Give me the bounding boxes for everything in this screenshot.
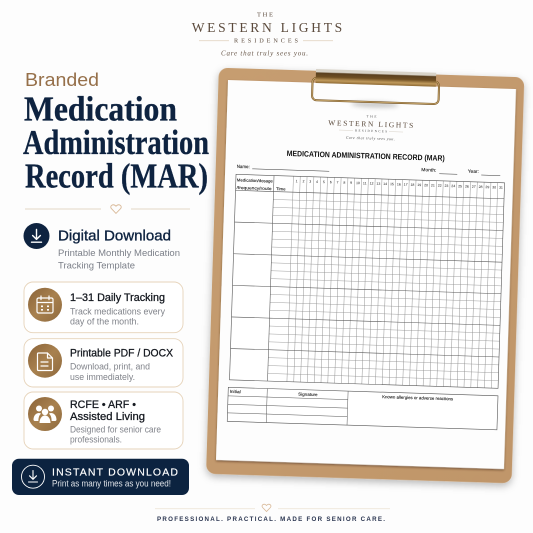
day numbers: 3 xyxy=(309,180,311,184)
day numbers: 15 xyxy=(390,182,394,186)
signature and allergies table xyxy=(227,387,498,430)
day numbers: 31 xyxy=(499,186,503,190)
footer divider with heart xyxy=(155,504,390,512)
brand logo: RESIDENCES xyxy=(234,38,299,45)
form logo: Care that truly sees you. xyxy=(346,136,395,141)
card text: Download, print, and xyxy=(70,362,150,372)
day numbers: 16 xyxy=(397,182,401,187)
card text: use immediately. xyxy=(70,372,135,382)
description xyxy=(58,248,180,272)
card text: Printable PDF / DOCX xyxy=(70,348,174,360)
day numbers: 22 xyxy=(438,184,442,188)
button text: INSTANT DOWNLOAD xyxy=(52,466,178,478)
grid column headers: Time xyxy=(276,186,286,191)
form logo: WESTERN LIGHTS xyxy=(328,118,413,130)
grid column headers xyxy=(237,177,287,192)
signature and allergies table: Signature xyxy=(298,392,318,397)
day numbers: 1 xyxy=(296,179,298,183)
form fields xyxy=(237,161,500,177)
day numbers: 24 xyxy=(451,184,455,188)
card text: Designed for senior care xyxy=(70,425,161,435)
day numbers: 7 xyxy=(337,181,339,185)
form logo: THE xyxy=(366,114,377,119)
icon: people xyxy=(28,397,62,431)
signature and allergies table: Initial xyxy=(230,389,241,394)
title: Record (MAR) xyxy=(25,157,208,196)
brand logo: THE xyxy=(257,12,273,19)
icon: document xyxy=(28,344,62,378)
icon: calendar xyxy=(28,288,62,322)
brand logo xyxy=(192,12,342,58)
day numbers xyxy=(296,179,503,190)
clipboard board xyxy=(206,68,524,483)
divider with heart xyxy=(25,205,190,213)
card text xyxy=(70,348,174,382)
day numbers: 9 xyxy=(350,181,352,185)
day numbers: 30 xyxy=(492,185,496,190)
day numbers: 8 xyxy=(343,181,345,185)
footer tagline: PROFESSIONAL. PRACTICAL. MADE FOR SENIOR CARE. xyxy=(157,516,385,523)
card text: RCFE • ARF • xyxy=(70,399,136,411)
day numbers: 12 xyxy=(370,182,374,186)
subtitle: Branded: Branded xyxy=(25,69,99,90)
day numbers: 14 xyxy=(383,182,387,186)
paper sheet xyxy=(216,80,516,469)
card text: Track medications every xyxy=(70,306,165,316)
grid column headers: /frequency/route xyxy=(237,185,273,191)
form title: MEDICATION ADMINISTRATION RECORD (MAR) xyxy=(287,149,445,163)
day numbers: 20 xyxy=(424,183,428,187)
clipboard with form xyxy=(206,66,524,483)
form fields: Year: xyxy=(468,169,479,174)
form fields: Month: xyxy=(421,167,436,173)
day numbers: 29 xyxy=(485,185,489,189)
panel: daily tracking xyxy=(24,282,183,333)
day numbers: 11 xyxy=(363,181,367,185)
day numbers: 6 xyxy=(330,180,332,184)
day numbers: 19 xyxy=(417,183,421,187)
icon: download outline xyxy=(22,465,44,488)
day numbers: 10 xyxy=(356,181,360,185)
form logo: RESIDENCES xyxy=(355,129,387,134)
day numbers: 2 xyxy=(302,179,305,183)
day numbers: 26 xyxy=(465,185,469,189)
brand logo: WESTERN LIGHTS xyxy=(192,20,342,35)
card text: day of the month. xyxy=(70,316,139,326)
description: Printable Monthly Medication xyxy=(58,248,180,259)
form fields: Name: xyxy=(237,164,250,169)
day numbers: 18 xyxy=(410,183,415,187)
digital download heading block xyxy=(24,223,180,272)
signature and allergies table: Known allergies or adverse reactions xyxy=(382,394,453,401)
medication grid xyxy=(230,174,505,388)
title xyxy=(23,90,209,196)
day numbers: 27 xyxy=(472,185,476,189)
card text xyxy=(70,292,165,326)
grid column headers: Medication/dosage xyxy=(237,177,274,184)
card text: Assisted Living xyxy=(70,411,145,423)
day numbers: 23 xyxy=(444,184,449,188)
title: Medication xyxy=(24,90,177,129)
day numbers: 4 xyxy=(316,180,318,184)
title: Administration xyxy=(23,123,209,162)
card text: professionals. xyxy=(70,435,122,445)
day numbers: 21 xyxy=(431,183,435,188)
button: instant download xyxy=(12,459,189,495)
day numbers: 28 xyxy=(479,185,483,189)
heading: digital download: Digital Download xyxy=(58,229,171,245)
card text xyxy=(70,399,161,445)
day numbers: 13 xyxy=(376,182,380,186)
panel: printable formats xyxy=(24,339,183,387)
card text: 1–31 Daily Tracking xyxy=(70,292,165,304)
button: instant download: Print as many times as you need! xyxy=(52,479,171,489)
icon: download xyxy=(24,223,50,249)
form logo xyxy=(328,113,414,142)
metal clip xyxy=(312,69,439,110)
description: Tracking Template xyxy=(58,260,135,272)
panel: care settings xyxy=(24,392,183,449)
day numbers: 25 xyxy=(458,184,462,188)
day numbers: 17 xyxy=(404,183,408,187)
brand logo: Care that truly sees you. xyxy=(221,50,308,58)
day numbers: 5 xyxy=(323,180,325,184)
